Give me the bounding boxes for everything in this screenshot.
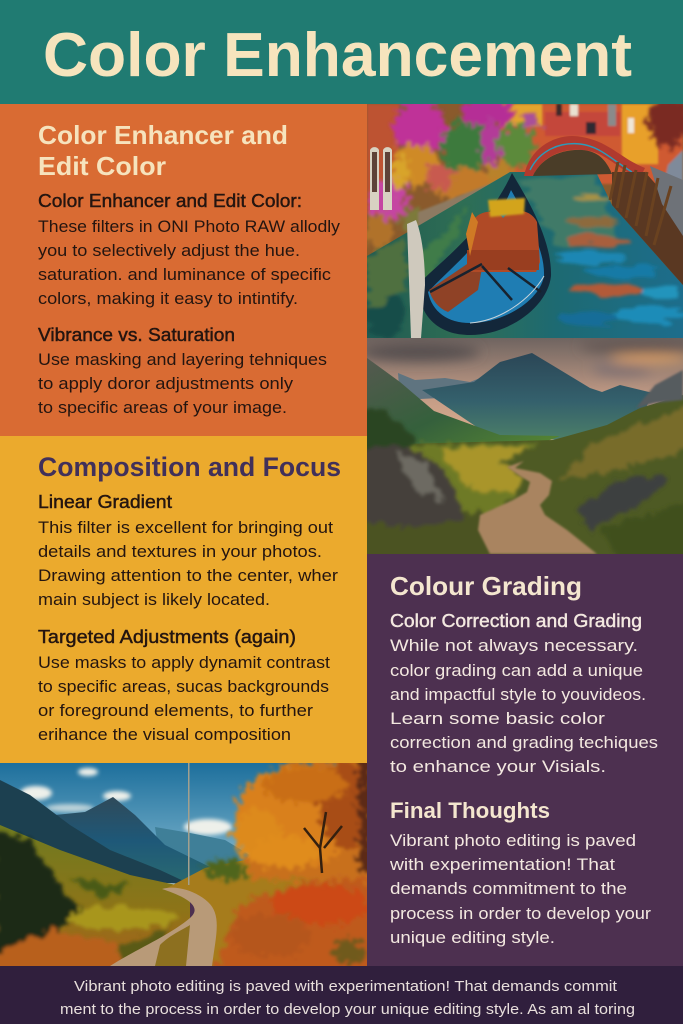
photo: venice canal with gondola [364, 96, 683, 338]
text block: color enhancer description: saturation. and luminance of specific [38, 265, 332, 284]
text block: color correction and grading: Color Correction and Grading [390, 611, 642, 631]
text block: linear gradient: Linear Gradient [38, 492, 172, 512]
text block: final thoughts: unique editing style. [390, 928, 555, 947]
text block: final thoughts: process in order to develop your [390, 904, 651, 923]
text block: final thoughts: with experimentation! That [389, 855, 615, 874]
text block: color enhancer description: you to selectively adjust the hue. [38, 241, 300, 260]
text block: color correction and grading: to enhance your Visials. [390, 757, 606, 776]
photo: autumn mountain road [0, 755, 375, 975]
text block: color enhancer description: Color Enhancer and Edit Color: [38, 191, 302, 211]
right hillside [560, 405, 683, 560]
text block: color correction and grading: and impactful style to youvideos. [390, 685, 646, 704]
gondola [407, 173, 551, 338]
title: Color Enhancement [43, 21, 632, 90]
photo: mountain valley at dusk [360, 338, 683, 560]
left ridge [0, 780, 190, 884]
text block: linear gradient: details and textures in your photos. [38, 542, 322, 561]
heading: composition and focus: Composition and Focus [38, 452, 341, 482]
main peak [55, 797, 212, 885]
text block: targeted adjustments: or foreground elements, to further [38, 701, 313, 720]
panel: colour grading [367, 554, 683, 966]
distant range [398, 373, 478, 399]
panel: composition and focus [0, 436, 367, 763]
left slope [367, 358, 560, 452]
right hillside [168, 860, 328, 966]
footer text: ment to the process in order to develop your unique editing style. As am al toring [60, 1002, 635, 1018]
text block: linear gradient: This filter is excellent for bringing out [38, 518, 333, 537]
autumn tree [233, 755, 375, 880]
text block: targeted adjustments: erihance the visual composition [38, 725, 291, 744]
canal wall and mooring poles [610, 162, 683, 285]
main mountain [422, 353, 653, 440]
text block: vibrance vs saturation: Vibrance vs. Saturation [38, 325, 235, 345]
footer band [0, 966, 683, 1024]
arches [370, 147, 392, 210]
text block: linear gradient: main subject is likely located. [38, 590, 270, 609]
valley floor base [415, 395, 683, 554]
clouds [20, 768, 232, 835]
text block: final thoughts: Vibrant photo editing is paved [390, 831, 636, 850]
text block: color enhancer description [38, 191, 341, 308]
split comparison line [188, 763, 190, 885]
left rocks and trees [367, 406, 484, 534]
meadow [409, 440, 537, 516]
text block: targeted adjustments: Targeted Adjustments (again) [38, 627, 296, 647]
text block: color correction and grading: Learn some basic color [390, 709, 605, 728]
heading: colour grading: Colour Grading [390, 571, 582, 601]
text block: linear gradient: Drawing attention to the center, wher [38, 566, 338, 585]
canal water [367, 172, 683, 338]
heading: final thoughts: Final Thoughts [390, 798, 550, 823]
bridge [524, 136, 645, 178]
text block: color enhancer description: colors, making it easy to intintify. [38, 289, 298, 308]
footer text [60, 979, 635, 1018]
text block: vibrance vs saturation: to specific areas of your image. [38, 398, 287, 417]
buildings [367, 104, 683, 214]
text block: targeted adjustments: Use masks to apply dynamit contrast [38, 653, 330, 672]
text block: targeted adjustments: to specific areas, sucas backgrounds [38, 677, 329, 696]
header band [0, 0, 683, 104]
text block: vibrance vs saturation [38, 325, 327, 417]
flowering foliage [364, 96, 683, 250]
heading: color enhancer and edit color [38, 120, 288, 181]
text block: linear gradient [38, 492, 338, 609]
text block: color enhancer description: These filters in ONI Photo RAW allodly [38, 217, 341, 236]
text block: color correction and grading: color grading can add a unique [390, 661, 643, 680]
meadow [0, 825, 190, 966]
text block: vibrance vs saturation: Use masking and layering tehniques [38, 350, 327, 369]
heading: color enhancer and edit color: Color Enhancer and [38, 120, 288, 150]
far mountains [155, 827, 249, 867]
text block: color correction and grading [390, 611, 658, 776]
winding path [478, 461, 597, 554]
footer text: Vibrant photo editing is paved with experimentation! That demands commit [74, 979, 617, 995]
text block: final thoughts: demands commitment to the [390, 879, 627, 898]
heading: color enhancer and edit color: Edit Color [38, 151, 166, 181]
text block: final thoughts [389, 831, 651, 947]
text block: vibrance vs saturation: to apply doror adjustments only [38, 374, 294, 393]
text block: color correction and grading: While not always necessary. [390, 636, 638, 655]
winding road [110, 888, 217, 966]
panel: color enhancer [0, 104, 367, 436]
text block: targeted adjustments [38, 627, 330, 744]
stone wall of the bank [417, 181, 494, 226]
text block: color correction and grading: correction and grading techiques [390, 733, 658, 752]
